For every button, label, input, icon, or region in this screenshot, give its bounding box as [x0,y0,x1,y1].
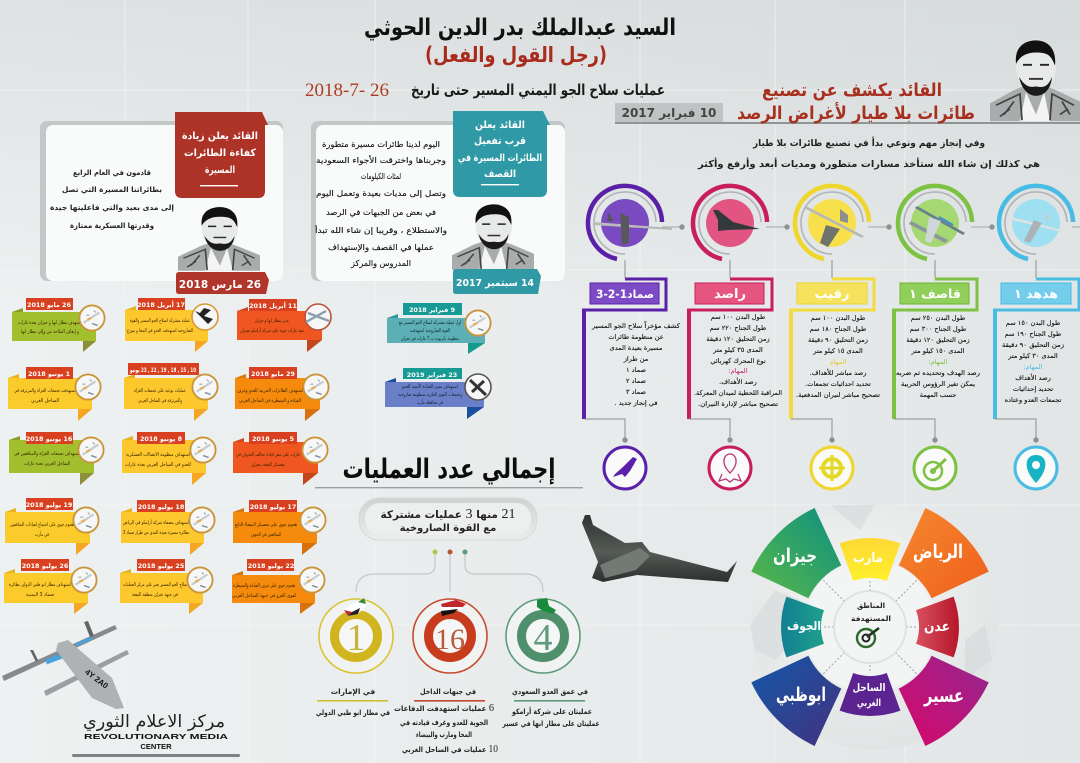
text: internal fronts operations: 10 عمليات في الساحل الغربي [402,743,498,755]
quote text: إلى مدى بعيد والتي فاعليتها جيدة [50,203,174,212]
panel: drone Raqib [789,186,892,489]
segment: Aden [916,597,959,657]
announcement heading [737,80,975,124]
specifications: طول الجناح ٣٠٠ سم [910,325,966,333]
panel: drone Samad 1-2-3 [582,186,685,489]
drone emblem [693,186,767,259]
ribbon: 22 July 2018: هجوم جوي على غرف القيادة والسيطرة [233,583,295,589]
ribbon: 26 May 2018 [12,298,105,352]
date badge [615,103,723,122]
specifications: رصد الأهداف. [719,377,757,386]
specifications: المهام [830,358,847,366]
panel title: صماد1-2-3 [596,287,654,301]
quote text: المدروس والمركز [350,258,411,268]
date badge: 26 مارس 2018 [179,279,261,291]
ribbon: 19 July 2018: في مأرب [35,530,49,538]
logo: Revolutionary Media Center: REVOLUTIONARY MEDIA [84,732,229,741]
counter: Yemen 16: 16 [435,623,465,656]
ribbon: 23 February 2019: 23 فبراير 2019 [407,371,457,379]
icon: location pin [1015,447,1057,489]
segment: West Coast: الساحل [852,682,886,694]
ribbon: 23 February 2019: وتجمعات القوى الغازية بمنظومة صاروخية [398,392,462,398]
specifications: المهام: [928,358,948,366]
specifications: زمن التحليق ١٢٠ دقيقة [706,335,770,343]
ribbon: 17 April 2018: عملية مشتركة لسلاح الجو المسير والقوة [130,318,190,324]
specifications: نوع المحرك كهربائي [710,357,766,365]
specifications [796,314,880,399]
quote heading: كفاءة الطائرات [184,148,256,159]
panel title [590,283,659,304]
specifications: طول البدن ١٠٠ سم [811,314,865,322]
panel: drone Qasef 1 [892,186,995,489]
panel: header announcement [615,39,1080,170]
segment: West Coast: الغربي [857,698,881,709]
counter: UAE 1: 1 [346,617,366,659]
ribbon: 26 May 2018: 26 مايو 2018 [27,301,72,309]
segment: Aden: عدن [924,619,950,635]
specifications: مسيرة بعيدة المدى [610,344,662,352]
quote heading: المسيرة [205,165,235,176]
date badge [176,272,269,294]
segment: Jizan [751,508,841,598]
specifications: طول الجناح ١٩٠ سم [1005,330,1061,338]
ribbon: 22 July 2018: 22 يوليو 2018 [248,562,294,570]
ribbon: 5 June 2018 [233,432,328,485]
segment: Riyadh [899,508,989,598]
panel title: قاصف ١ [909,286,961,301]
drone emblem [898,186,972,259]
panel: drone Rased [687,186,790,489]
segment: Jizan: جيزان [773,545,817,567]
icon: map pin [709,447,751,489]
specifications: تحديد احداثيات تجمعات. [805,380,871,388]
subtitle: (رجل القول والفعل) [425,43,607,67]
quote text: وقدرتها العسكرية ممتازة [70,221,154,230]
ribbon: 16 June 2018 [9,432,104,485]
text: internal fronts operations: 6 عمليات استهدفت الدفاعات [394,702,494,714]
segment: Al Jawf: الجوف [787,619,821,634]
callout: 21 operations: مع القوة الصاروخية [400,523,496,534]
text: Saudi depth operations: عمليتان على شركة أرامكو [511,706,592,716]
specifications [591,321,681,407]
ribbon: 17 April 2018 [125,298,218,352]
specifications: المراقبة اللحظية لميدان المعركة. [694,389,782,397]
ribbon: June multi-dates: 10 , 15 , 18 , 19 , 22 , 23 يونيو [129,366,196,374]
segment: Abu Dhabi [751,656,841,746]
date badge [453,269,541,294]
icon: leader portrait [178,206,260,271]
quote heading [453,111,550,197]
icon: leader portrait [452,204,534,270]
specifications [1002,319,1064,404]
specifications: المهام: [728,367,748,375]
specifications: من طراز [623,355,648,363]
icon: large flying wing drone [582,515,737,582]
quote text: عملها في القصف والإستهداف [328,242,434,253]
text: Saudi depth operations: عمليتان على مطار ابها في عسير [502,719,600,728]
icon: surveillance drone [2,621,129,709]
ribbon: 11 April 2018 [237,299,331,352]
logo: Revolutionary Media Center: مركز الاعلام الثوري [83,712,225,732]
panel: timeline ribbons column 3 [232,299,331,614]
ribbon: 26 July 2018 [4,559,97,614]
ribbon: 29 May 2018: القيادة و السيطرة في الساحل الغربي [239,398,301,404]
hub: targeted regions: المناطق [857,602,885,610]
panel title [797,283,867,304]
announcement heading: القائد يكشف عن تصنيع [762,80,942,101]
announcement text [697,136,1040,170]
panel: timeline ribbons column 4 [385,303,491,419]
quote text [50,168,174,230]
ribbon: 11 April 2018: عدن بمطار ابها و جيزان [255,318,289,324]
text: UAE operations [316,687,390,717]
segment: Asir [899,656,989,746]
sub heading: operations until date [305,80,665,101]
ribbon: 26 May 2018: و إيقاف الملاحة من وإلى مطار ابها [21,329,79,335]
ribbon: 29 May 2018: استهدف الطائرات الحربية للعدو وغرف [237,388,303,394]
callout: 21 operations: 21 منها 3 عمليات مشتركة [380,507,516,522]
specifications: المدى ٣٥ كيلو متر [712,346,763,354]
ribbon: 9 February 2018: 9 فبراير 2018 [409,306,456,314]
panel title [695,283,764,304]
quote text: والاستطلاع ، وقريبا إن شاء الله تبدأ [315,225,447,236]
quote heading: قرب تفعيل [474,136,526,147]
specifications: زمن التحليق ١٢٠ دقيقة [906,336,970,344]
date badge: 14 سبتمبر 2017 [456,278,534,289]
segment: Marib [840,538,900,581]
hub: targeted regions: المستهدفة [851,615,891,623]
drone emblem [795,186,869,259]
panel title: راصد [714,287,746,302]
specifications: حسب المهمة [920,391,956,399]
drone emblem [999,186,1073,259]
segment: Al Jawf [781,597,824,657]
ribbon: 9 February 2018 [387,303,491,354]
text: UAE operations: في الإمارات [331,687,375,696]
specifications: المهام: [1023,363,1043,371]
date badge: 10 فبراير 2017 [622,106,716,120]
icon: surveillance drone: 4Y 2A0 [83,667,110,691]
ribbon: 18 July 2018: استهداف مصفاة شركة أرامكو في الرياض [123,519,189,526]
ribbon: 9 February 2018: منظومة باتريوت ب 7 غارات في نجران [401,336,459,342]
logo: Revolutionary Media Center: CENTER [140,742,172,751]
icon: leader portrait [990,39,1080,121]
specifications: عن منظومة طائرات [608,333,664,341]
specifications: طول الجناح ٢٢٠ سم [710,324,766,332]
ribbon: 17 July 2018: 17 يوليو 2018 [250,503,296,511]
icon: Saudi map [537,598,556,614]
icon: UAE map [344,598,366,616]
panel: timeline ribbons column 2 [120,298,218,614]
specifications: زمن التحليق ٩٠ دقيقة [1002,341,1064,349]
specifications: المدى ١٥ كيلو متر [812,347,863,355]
ribbon: 19 July 2018 [5,498,99,555]
announcement text: وفي إنجاز مهم ونوعي بدأ في تصنيع طائرات بلا طيار [752,136,985,149]
specifications: صماد ٢ [626,377,646,385]
segment: Abu Dhabi: ابوظبي [776,684,826,706]
specifications: كشف مؤخراً سلاح الجو المسير [591,321,681,330]
ribbon: 16 June 2018: استهداف تجمعات الغزاة والمنافقين في [14,451,80,457]
text: internal fronts operations: الجوية للعدو وغرف قيادته في [400,718,488,727]
title: السيد عبدالملك بدر الدين الحوثي [364,15,676,41]
quote text: وتصل إلى مديات بعيدة وتعمل اليوم [316,188,446,199]
ribbon: 8 June 2018: استهداف منظومة الاتصالات العسكرية [126,452,190,458]
ribbon: 23 February 2019: استهداف مبنى القيادة الأمنية للعدو [401,383,458,390]
callout: 21 operations [359,498,537,540]
quote text: اليوم لدينا طائرات مسيرة متطورة [322,139,440,149]
ribbon: 1 June 2018 [8,367,101,421]
ribbon: 25 July 2018: سلاح الجو المسير يغير على مركز العمليات [123,582,187,588]
counter: UAE 1 [319,598,393,673]
ribbon: 26 July 2018: استهداف مطار ابو ظبي الدولي بطائرة [9,582,71,588]
quote heading [175,112,268,198]
ribbon: 17 April 2018: 17 أبريل 2018 [137,300,185,309]
panel title: هدهد ١ [1014,286,1058,301]
ribbon: 1 June 2018: 1 يونيو 2018 [28,370,70,378]
specifications: رصد مباشر للأهداف. [810,368,866,377]
ribbon: 16 June 2018: 16 يونيو 2018 [26,435,73,443]
ribbon: 16 June 2018: الساحل الغربي بعدة غارات [24,461,70,467]
ribbon: 1 June 2018: استهدفت تجمعات الغزاة والمرتزقة في [14,388,76,394]
chart: targeted regions wheel [750,504,998,750]
drone emblem [588,186,672,259]
ribbon: 8 June 2018 [122,432,216,485]
specifications: في إنجاز جديد . [615,399,657,407]
text: Saudi depth operations: في عمق العدو السعودي [512,687,588,696]
heading: total operations: إجمالي عدد العمليات [342,454,556,485]
text: internal fronts operations: في جبهات الداخل [420,687,476,696]
ribbon: 25 July 2018 [120,559,213,614]
ribbon: 8 June 2018: 8 يونيو 2018 [140,435,183,443]
panel title [1001,283,1071,304]
specifications: طول البدن ١٥٠ سم [1006,319,1060,327]
specifications: رصد الهدف وتحديده ثم ضربه [896,369,980,377]
counter: Yemen 16 [413,599,487,673]
ribbon: 26 July 2018: صماد 3 اليمنية [26,592,54,598]
ribbon: 5 June 2018: 5 يونيو 2018 [252,435,294,443]
quote text: قادمون في العام الرابع [73,168,151,177]
text: internal fronts operations: المخا ومارب والبيضاء [416,730,472,739]
ribbon: 18 July 2018 [121,500,215,555]
ribbon: 22 July 2018: لقوى الغزو في جبهة الساحل الغربي [232,593,296,599]
text: UAE operations: في مطار ابو ظبي الدولي [316,708,390,717]
panel: drone Hodhod 1 [993,186,1080,489]
logo: Revolutionary Media Center [2,621,240,757]
specifications: طول الجناح ١٨٠ سم [810,325,866,333]
specifications: طول البدن ٢٥٠ سم [911,314,965,322]
panel: quote 14 September 2017 [311,111,565,294]
ribbon: 18 July 2018: 18 يوليو 2018 [138,503,185,511]
specifications: تجمعات العدو وعتاده [1005,396,1061,404]
quote heading: القائد يعلن [475,120,525,131]
ribbon: 23 February 2019: في محافظة مأرب [417,398,443,406]
segment: Marib: مارب [853,551,883,566]
specifications: رصد الأهداف [1015,373,1051,382]
ribbon: June multi-dates: عمليات نوعية على تجمعات الغزاة [134,388,186,394]
quote text: في بعض من الجبهات في الرصد [326,207,436,217]
specifications [694,313,782,408]
ribbon: June multi-dates: والمرتزقة في الساحل الغربي [138,398,182,404]
icon: target [914,447,956,489]
ribbon: 17 April 2018: الصاروخية استهدفت العدو في المخا و موزع [127,328,193,334]
ribbon: 11 April 2018: تنفذ غارات جوية على شركة أرامكو بجيزان [240,327,304,334]
ribbon: 23 February 2019 [385,368,491,419]
ribbon: 29 May 2018: 29 مايو 2018 [251,370,296,378]
ribbon: 8 June 2018: للعدو في الساحل الغربي بعدة غارات [125,462,191,468]
ribbon: 1 June 2018: الساحل الغربي [31,398,59,404]
ribbon: 5 June 2018: غارات على مقر قيادة تحالف العدوان في [236,452,300,458]
ribbon: 26 May 2018: استهدف مطار ابها و جيزان بعدة غارات [18,320,82,326]
specifications: يمكن تغير الرؤوس الحربية [901,380,975,388]
specifications: زمن التحليق ٩٠ دقيقة [808,336,868,344]
segment: West Coast [840,673,900,716]
panel title [900,283,969,304]
specifications: صماد ١ [626,366,646,374]
specifications [896,314,980,399]
specifications: المدى ٣٠ كيلو متر [1007,352,1058,360]
icon: aircraft [604,447,646,489]
quote heading: القائد يعلن زيادة [182,131,258,142]
icon: Yemen map [441,600,466,616]
specifications: تحديد إحداثيات [1013,385,1053,393]
ribbon: 19 July 2018: 19 يوليو 2018 [26,501,73,509]
panel title: رقيب [814,287,850,302]
ribbon: June multi-dates [124,363,218,421]
ribbon: 18 July 2018: بطائرة مسيرة بعيدة المدى من طراز صماد 3 [123,530,189,536]
ribbon: 29 May 2018 [235,367,329,421]
announcement text: هي كذلك إن شاء الله ستأخذ مسارات متطورة ومديات أبعد وأرفع وأكثر [697,157,1040,170]
ribbon: 26 July 2018: 26 يوليو 2018 [22,562,69,570]
ribbon: 17 July 2018: للمنافقين في الجوف [251,532,281,538]
quote text: بطائراتنا المسيرة التي تصل [62,185,162,194]
panel: quote 26 March 2018 [40,112,283,294]
quote text: وجربناها واخترقت الأجواء السعودية [316,155,446,165]
ribbon: 25 July 2018: 25 يوليو 2018 [138,562,184,570]
text: Saudi depth operations [502,687,600,728]
counter: Saudi 4: 4 [534,617,552,659]
specifications: المدى ١٥٠ كيلو متر [910,347,965,355]
specifications: تصحيح مباشر لإدارة النيران. [698,400,778,408]
specifications: تصحيح مباشر لنيران المدفعية. [796,391,880,399]
quote text [315,139,447,268]
quote heading: القصف [484,169,516,180]
ribbon: 9 February 2018: أول عملية مشتركة لسلاح الجو المسير مع [399,319,461,326]
icon: crosshair [811,447,853,489]
connectors from callout to counters [356,550,543,592]
ribbon: 19 July 2018: هجوم جوي على اجتماع لقيادات المنافقين [10,522,74,528]
announcement heading: طائرات بلا طيار لأغراض الرصد [737,102,975,124]
ribbon: 17 July 2018: هجوم جوي على معسكر البيضاء التابع [235,522,297,528]
hub: targeted regions [834,591,906,663]
quote text: لمئات الكيلومات [361,171,401,181]
specifications: صماد ٣ [626,388,646,396]
ribbon: 25 July 2018: في جبهة نجران منطقة البقعة [132,592,178,598]
ribbon: 17 July 2018 [233,500,326,555]
ribbon: 22 July 2018 [232,559,325,614]
ribbon: 11 April 2018: 11 أبريل 2018 [249,301,297,310]
segment: Asir: عسير [923,685,964,707]
specifications: طول البدن ١٠٠ سم [711,313,765,321]
panel: timeline ribbons column 1 [4,298,105,614]
icon: target [857,628,879,647]
sub heading: operations until date: 2018-7- 26 [305,80,389,101]
ribbon: 5 June 2018: معسكر البقعة بنجران [251,462,285,468]
quote heading: الطائرات المسيرة في [458,153,542,164]
segment: Riyadh: الرياض [913,541,963,563]
text: internal fronts operations [394,687,498,755]
ribbon: 9 February 2018: القوة الصاروخية استهدفت [410,328,450,334]
sub heading: operations until date: عمليات سلاح الجو اليمني المسير حتى تاريخ [411,81,665,99]
counter: Saudi 4 [506,598,580,673]
